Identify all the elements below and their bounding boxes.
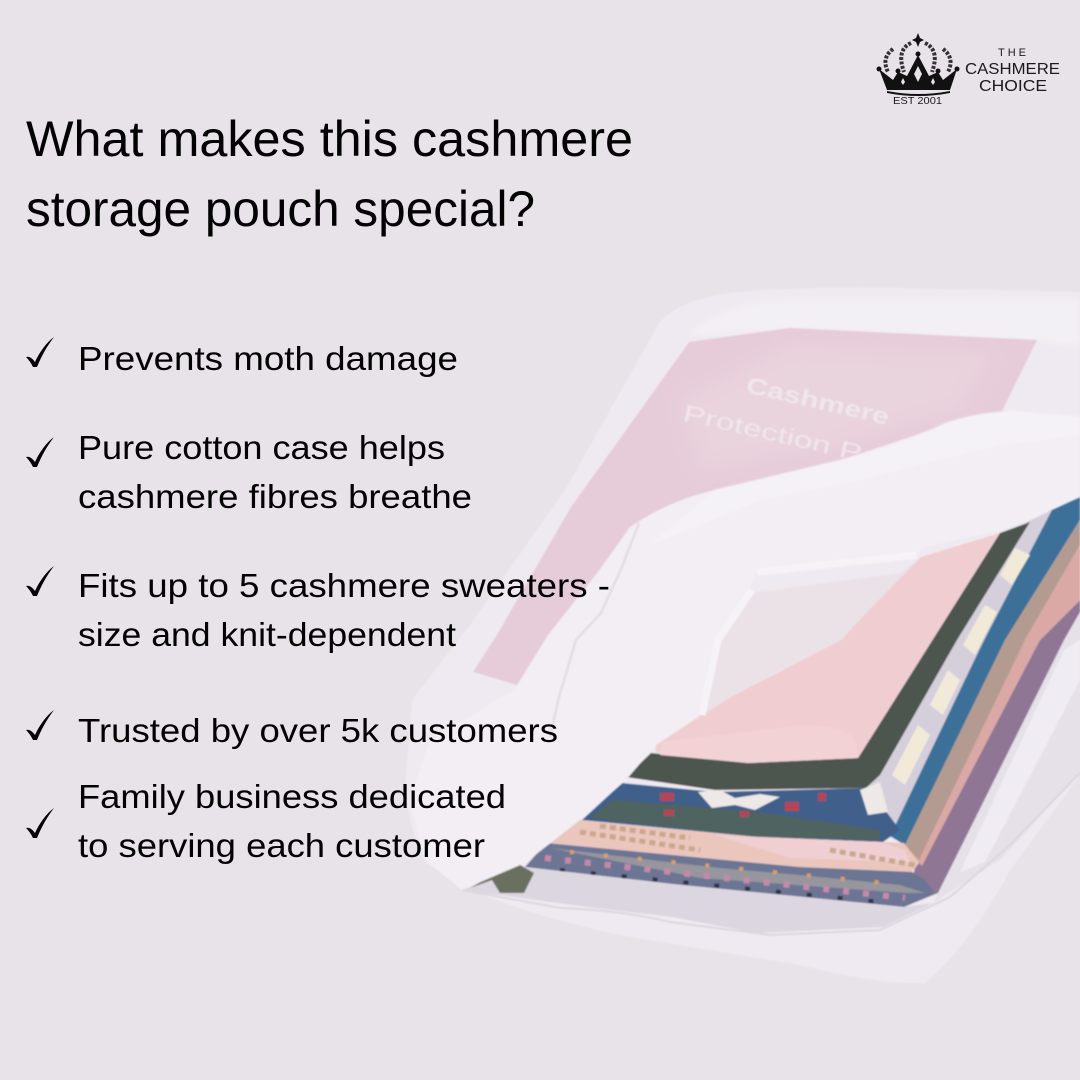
- laurel branches: [885, 43, 951, 72]
- right inner pouch: [933, 610, 1080, 903]
- check icon: [26, 808, 54, 838]
- multicolour tweed sweater: [525, 843, 935, 907]
- sweater stack: [525, 497, 1080, 907]
- tan stripe: [905, 520, 1080, 860]
- product photo: opened cashmere storage pouch: [405, 288, 1080, 983]
- white fabric flap: [410, 412, 1080, 890]
- pink knit band: [908, 545, 1080, 866]
- tan knit flecks: [580, 826, 915, 865]
- purple outer sweater edge: [904, 600, 1080, 907]
- benefit 4: trusted: Trusted by over 5k customers: [78, 712, 558, 749]
- green stripe in patterned sweater: [590, 800, 880, 840]
- grey tweed streak: [550, 848, 925, 893]
- red motif dots: [660, 793, 826, 817]
- right inner highlight: [960, 640, 1080, 872]
- check icon: [26, 337, 54, 367]
- tan and pink sweater: [546, 820, 919, 872]
- panel shading: [680, 345, 990, 470]
- flap stitched seam: [550, 523, 639, 737]
- sheer mesh panel: [698, 557, 921, 717]
- pink top sweater: [656, 533, 1000, 763]
- top band highlight: [690, 300, 1080, 345]
- crown icon: [876, 33, 960, 96]
- blue patterned sweater: [582, 783, 900, 842]
- check icon: [26, 437, 54, 467]
- logo wordmark: THE: [998, 47, 1026, 59]
- benefit 2: cotton case: Pure cotton case helps: [78, 429, 445, 466]
- benefit 3: capacity: [26, 566, 610, 653]
- logo wordmark: [893, 47, 1060, 107]
- logo wordmark: CHOICE: [979, 78, 1047, 95]
- plaid cream stripes: [892, 548, 1030, 785]
- benefit 2: cotton case: [26, 429, 472, 515]
- tweed dots: [545, 858, 905, 898]
- benefit 3: capacity: Fits up to 5 cashmere sweaters -: [78, 567, 610, 604]
- panel label text: Protection Pouch: [681, 400, 935, 482]
- benefit 2: cotton case: cashmere fibres breathe: [78, 478, 472, 515]
- dark green sweater: [626, 522, 1030, 790]
- title: [26, 111, 633, 237]
- logo wordmark: CASHMERE: [965, 61, 1060, 78]
- benefit 5: family business: to serving each customer: [78, 827, 485, 864]
- pink inner panel: [473, 328, 1037, 685]
- benefit 5: family business: [26, 778, 506, 864]
- pink section of tan sweater: [715, 835, 910, 862]
- moss fibre tuft: [470, 862, 534, 893]
- pouch outer shell: [405, 288, 1080, 983]
- panel label text: [681, 372, 935, 482]
- white motif in patterned sweater: [698, 782, 888, 815]
- benefit 5: family business: Family business dedicated: [78, 778, 506, 815]
- zipper line: [462, 773, 1080, 935]
- bottom pouch interior: [462, 867, 933, 933]
- logo: [876, 33, 1060, 107]
- flap upper hem: [650, 412, 1080, 545]
- logo wordmark: EST 2001: [893, 95, 942, 107]
- check icon: [26, 710, 54, 740]
- check icon: [26, 566, 54, 596]
- inner seam band: [702, 555, 917, 715]
- benefit 3: capacity: size and knit-dependent: [78, 616, 456, 653]
- title: What makes this cashmere: [26, 111, 633, 167]
- pink sweater fold: [660, 726, 858, 763]
- benefit 1: moth damage: Prevents moth damage: [78, 340, 458, 377]
- title: storage pouch special?: [26, 181, 535, 237]
- white plaid band: [866, 510, 1052, 830]
- blue plaid band: [888, 497, 1080, 845]
- panel label text: Cashmere: [744, 372, 892, 430]
